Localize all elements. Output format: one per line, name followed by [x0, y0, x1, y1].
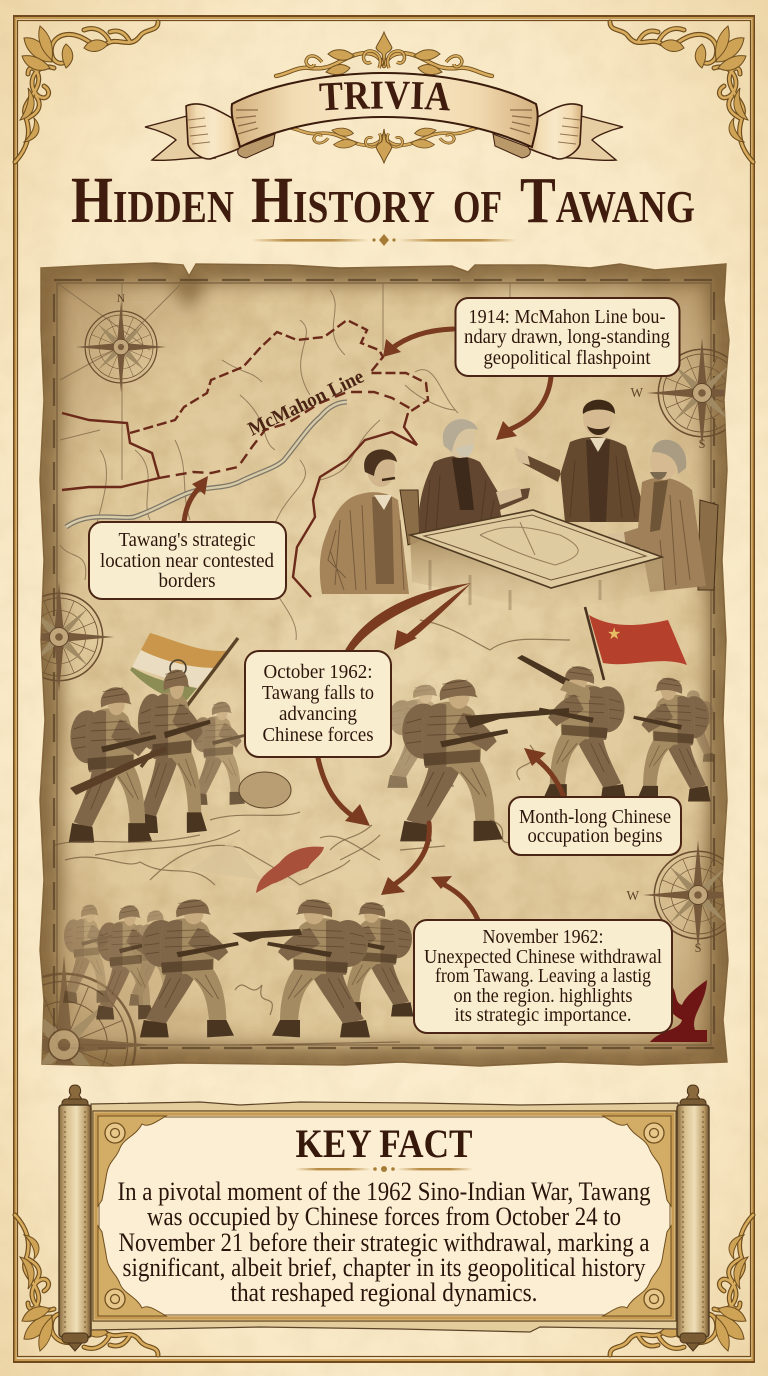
- illustration: negotiators at the table: [320, 399, 718, 612]
- McMahon Line map: [60, 290, 458, 640]
- callout: Tawang's location: location near contested: [100, 550, 274, 572]
- panel: parchment map: [39, 262, 730, 1067]
- compass: south-east: S: [695, 941, 702, 955]
- callout: month-long occupation: [509, 797, 681, 855]
- illustration: sketched mountains and red patch: [65, 620, 570, 893]
- callout: October 1962: October 1962:: [264, 661, 372, 683]
- left scroll rod: [59, 1085, 91, 1351]
- compass: east: [630, 338, 728, 448]
- callout: November 1962: Unexpected Chinese withdrawal: [424, 946, 662, 968]
- McMahon dashed boundary: [159, 392, 413, 478]
- key fact text: November 21 before their strategic withdrawal, marking a: [118, 1227, 650, 1257]
- callout: November 1962: [414, 920, 672, 1033]
- callout: November 1962: on the region. highlights: [454, 985, 633, 1007]
- border lines: [62, 413, 417, 597]
- arrow: Tawang box to river: [184, 476, 208, 522]
- arrows: [184, 329, 564, 920]
- callout: October 1962: Tawang falls to: [262, 682, 374, 704]
- trivia banner: [144, 30, 624, 164]
- arrow: 1914 box to negotiators: [496, 377, 551, 440]
- banner text: TRIVIA: TRIVIA: [319, 82, 450, 110]
- title: Tawang: [520, 164, 695, 237]
- title: History: [251, 164, 435, 237]
- corner ornament: bottom left: [15, 1215, 158, 1355]
- table with map: [410, 510, 664, 612]
- ribbon main band: [232, 73, 538, 147]
- river: [66, 402, 347, 527]
- red scorched patch: [256, 847, 324, 893]
- scroll sheet: [91, 1102, 678, 1332]
- map label: McMahon Line: McMahon Line: [245, 365, 368, 440]
- key fact text: In a pivotal moment of the 1962 Sino-Indian War, Tawang: [118, 1176, 650, 1206]
- panel: key fact scroll: [59, 1085, 709, 1351]
- ribbon tail: right: [493, 104, 623, 160]
- key fact text: significant, albeit brief, chapter in its geopolitical history: [122, 1252, 646, 1282]
- man seated with grey hair: [419, 418, 530, 540]
- indian flag: [130, 633, 238, 767]
- map sheet: [40, 262, 730, 1067]
- title: [71, 164, 695, 237]
- key fact heading: KEY FACT: [296, 1121, 473, 1166]
- ribbon tail: left: [145, 104, 275, 160]
- inner frame: [93, 1111, 676, 1321]
- right scroll rod: [677, 1085, 709, 1351]
- callout: October 1962: [245, 651, 391, 757]
- corner ornament: top right: [610, 22, 753, 162]
- callout: 1914: [456, 298, 680, 376]
- compass: east: S: [699, 437, 706, 451]
- callout: 1914: 1914: McMahon Line bou-: [468, 306, 666, 328]
- compass: north-west: N: [117, 292, 126, 305]
- man seated right: [608, 440, 706, 592]
- man standing gesturing: [514, 399, 648, 522]
- callout: November 1962: November 1962:: [482, 926, 604, 948]
- arrow: 1914 box to boundary: [383, 329, 453, 357]
- callout: 1914: geopolitical flashpoint: [484, 347, 651, 369]
- arrow: centre to skirmish: [381, 823, 429, 895]
- callout: month-long occupation: occupation begins: [528, 825, 663, 847]
- banner bottom ornament: [287, 127, 481, 163]
- callout: Tawang's location: Tawang's strategic: [118, 529, 256, 551]
- corner ornament: bottom right: [610, 1215, 753, 1355]
- callout: November 1962: from Tawang. Leaving a lastig: [435, 965, 651, 987]
- arrow: October box to soldiers: [318, 758, 370, 826]
- chinese flag: ★: [607, 626, 621, 643]
- callout: Tawang's location: [89, 522, 286, 599]
- corner ornament: top left: [15, 22, 158, 162]
- key fact divider: [295, 1166, 473, 1172]
- compass: south-west: [42, 956, 148, 1066]
- callout: October 1962: Chinese forces: [262, 724, 374, 746]
- illustration: Chinese soldiers with flag: [387, 607, 714, 850]
- title: OF: [453, 181, 502, 232]
- key fact text: [118, 1176, 650, 1307]
- ornament: maroon flourish: [650, 980, 707, 1042]
- title divider: [251, 234, 517, 246]
- compass: east: W: [631, 385, 644, 400]
- callout: 1914: ndary drawn, long-standing: [464, 326, 670, 348]
- callout: month-long occupation: Month-long Chinese: [519, 806, 671, 828]
- arrow: table to October box: [344, 583, 471, 652]
- compass: south-east: W: [627, 888, 640, 903]
- compass: north-west: [75, 292, 167, 393]
- callout: Tawang's location: borders: [158, 570, 216, 592]
- illustration: Indian soldiers with flag: [55, 633, 300, 855]
- arrow: Month-long box to soldier: [524, 748, 564, 797]
- illustration: skirmish at the bottom: [63, 899, 414, 1045]
- arrow: November box upward: [431, 876, 478, 920]
- compass: south-east: [626, 840, 726, 952]
- key fact text: that reshaped regional dynamics.: [230, 1277, 538, 1307]
- compass: west: [41, 582, 114, 692]
- territory outline: [130, 320, 428, 433]
- chinese flag: [585, 607, 687, 680]
- callout: November 1962: its strategic importance.: [454, 1004, 632, 1026]
- man standing left: [320, 449, 409, 594]
- key fact text: was occupied by Chinese forces from October 24 to: [147, 1201, 621, 1231]
- chairs: [400, 490, 718, 590]
- title: Hidden: [71, 164, 234, 237]
- banner top ornament: [276, 32, 492, 76]
- callout: October 1962: advancing: [279, 703, 357, 725]
